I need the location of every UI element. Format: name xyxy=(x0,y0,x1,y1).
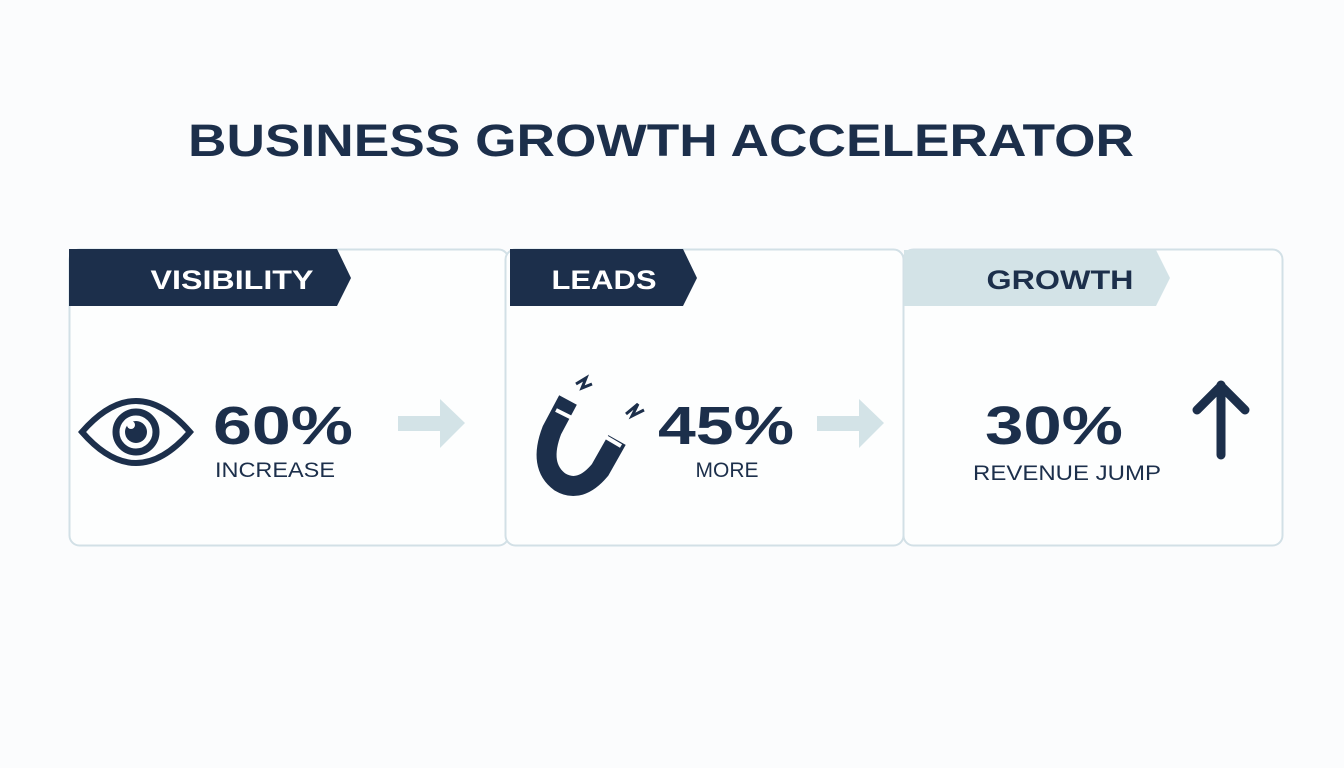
icon: magnet xyxy=(547,378,644,486)
stat: 30% xyxy=(973,396,1161,485)
panel: leads xyxy=(506,249,904,546)
header: leads: LEADS xyxy=(552,265,656,295)
arrow: right xyxy=(398,399,465,448)
header: visibility xyxy=(69,249,351,306)
header: growth: GROWTH xyxy=(986,265,1134,295)
icon: eye xyxy=(82,401,190,463)
stat: 30%: REVENUE JUMP xyxy=(973,462,1161,485)
header: leads xyxy=(510,249,697,306)
header: visibility: VISIBILITY xyxy=(150,265,314,295)
stat: 45%: 45% xyxy=(658,396,794,456)
arrow: right xyxy=(817,399,884,448)
panel: visibility xyxy=(69,249,508,546)
stat: 60%: INCREASE xyxy=(215,459,335,482)
stat: 60% xyxy=(213,396,353,482)
title: BUSINESS GROWTH ACCELERATOR xyxy=(188,115,1134,166)
panel: growth xyxy=(904,250,1282,546)
icon: up arrow xyxy=(1197,385,1245,455)
stat: 45%: MORE xyxy=(696,459,758,482)
stat: 60%: 60% xyxy=(213,396,353,456)
stat: 30%: 30% xyxy=(985,396,1123,456)
header: growth xyxy=(904,250,1170,306)
stat: 45% xyxy=(658,396,794,482)
